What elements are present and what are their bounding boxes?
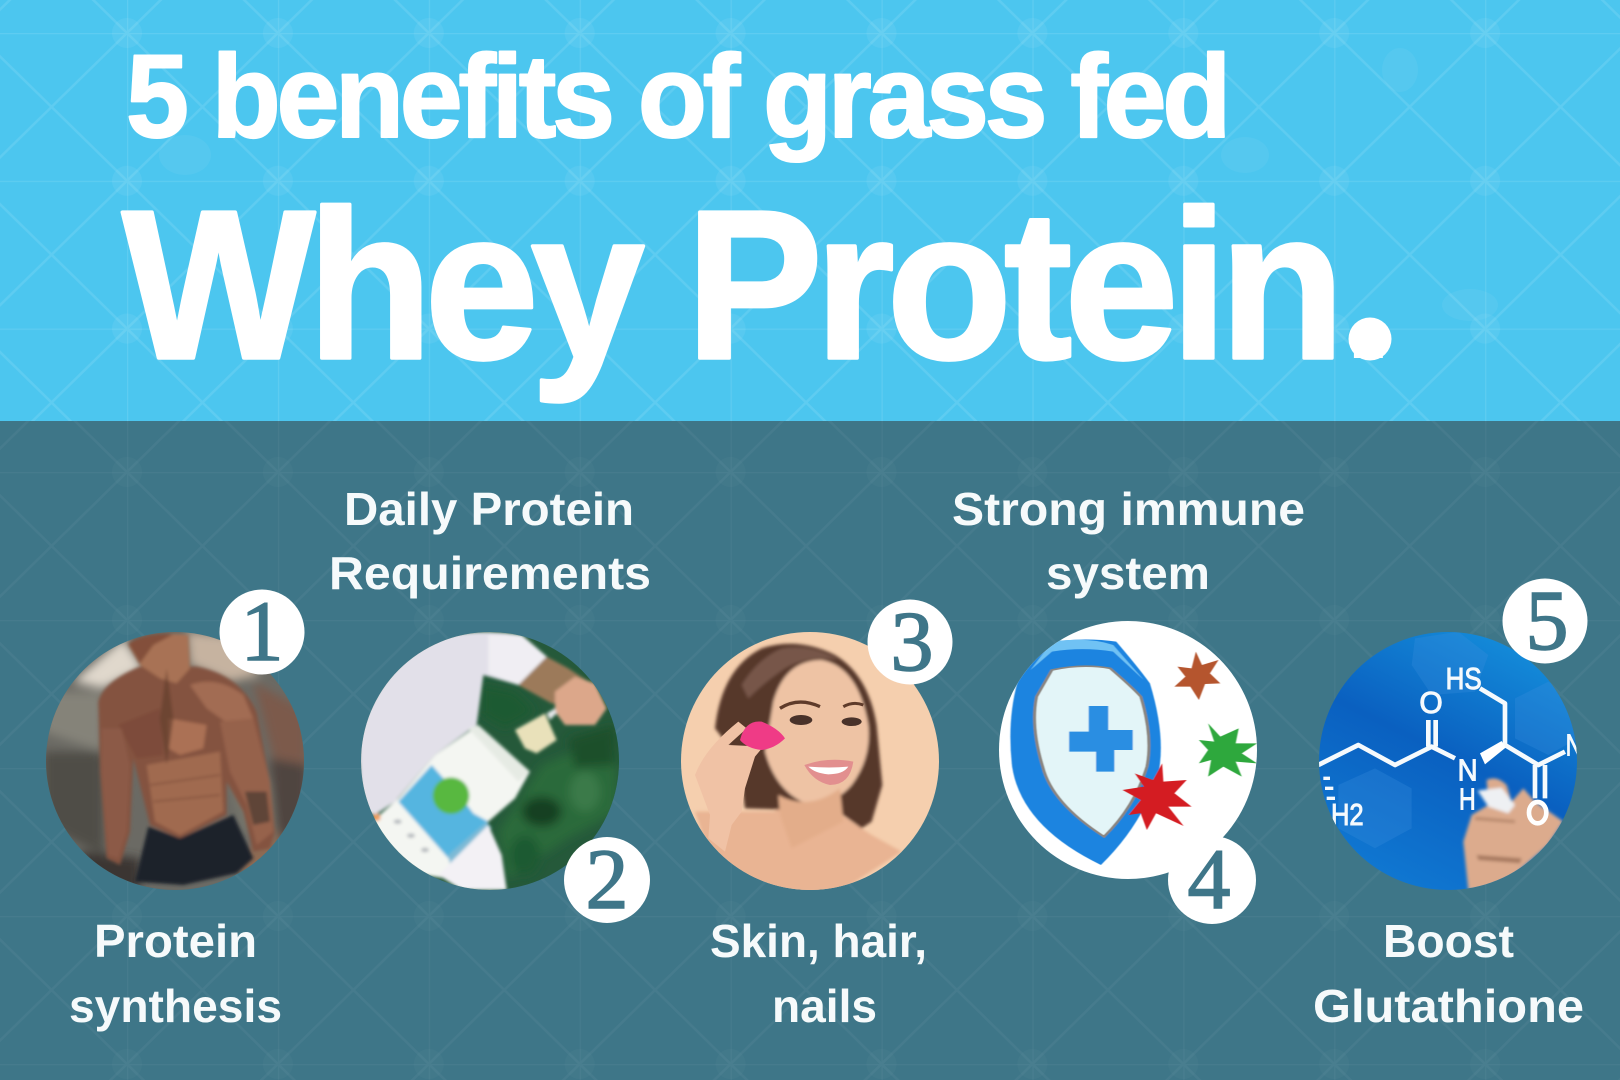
- label: skin hair nails: [710, 915, 927, 1032]
- molecule labels: [1331, 662, 1582, 832]
- badge 3: [868, 593, 952, 689]
- badge 5: [1502, 572, 1588, 668]
- molecule labels: HS: [1446, 662, 1482, 696]
- molecule labels: H2: [1331, 798, 1364, 832]
- label: protein synthesis: [69, 915, 282, 1032]
- shield: [1010, 640, 1161, 865]
- badge 4: [1168, 831, 1256, 927]
- title period: .: [1340, 173, 1397, 402]
- photo 1: muscular man: [43, 632, 307, 892]
- badge 2: [564, 831, 650, 927]
- panel: header: [0, 0, 1620, 421]
- label: strong immune system: Strong immune: [952, 483, 1305, 535]
- photo 3: smiling woman with makeup sponge: [681, 632, 939, 895]
- title line 2: Whey Protein: [122, 166, 1337, 403]
- badge 4: 4: [1188, 831, 1230, 927]
- badge 2: 2: [586, 831, 628, 927]
- label: protein synthesis: Protein: [94, 915, 257, 967]
- badge 1: [220, 583, 304, 679]
- badge 1: 1: [240, 583, 284, 679]
- molecule labels: O: [1419, 686, 1443, 720]
- label: skin hair nails: nails: [772, 980, 877, 1032]
- label: strong immune system: system: [1046, 547, 1210, 599]
- label: boost glutathione: Glutathione: [1313, 980, 1584, 1032]
- virus green: [1199, 723, 1257, 777]
- label: skin hair nails: Skin, hair,: [710, 915, 927, 967]
- virus red: [1122, 763, 1192, 830]
- label: protein synthesis: synthesis: [69, 980, 282, 1032]
- label: daily protein requirements: [329, 483, 651, 599]
- label: boost glutathione: [1313, 915, 1584, 1032]
- molecule labels: N: [1458, 753, 1478, 787]
- label: boost glutathione: Boost: [1383, 915, 1514, 967]
- molecule labels: N: [1566, 729, 1582, 763]
- label: strong immune system: [952, 483, 1305, 599]
- badge 5: 5: [1526, 572, 1568, 668]
- photo 5: molecule on blue board: [1318, 632, 1582, 890]
- illustration 4: shield and viruses: [999, 621, 1257, 879]
- molecule labels: H: [1459, 782, 1476, 816]
- hand with marker: [1463, 778, 1563, 890]
- molecule bonds: [1318, 688, 1565, 798]
- virus orange: [1174, 652, 1220, 700]
- title line 1: 5 benefits of grass fed: [126, 31, 1227, 163]
- badge 3: 3: [890, 593, 934, 689]
- label: daily protein requirements: Daily Protein: [344, 483, 634, 535]
- label: daily protein requirements: Requirements: [329, 547, 651, 599]
- photo 2: protein tub and scoop on grass: [358, 632, 619, 890]
- panel: benefits: [46, 457, 1588, 1079]
